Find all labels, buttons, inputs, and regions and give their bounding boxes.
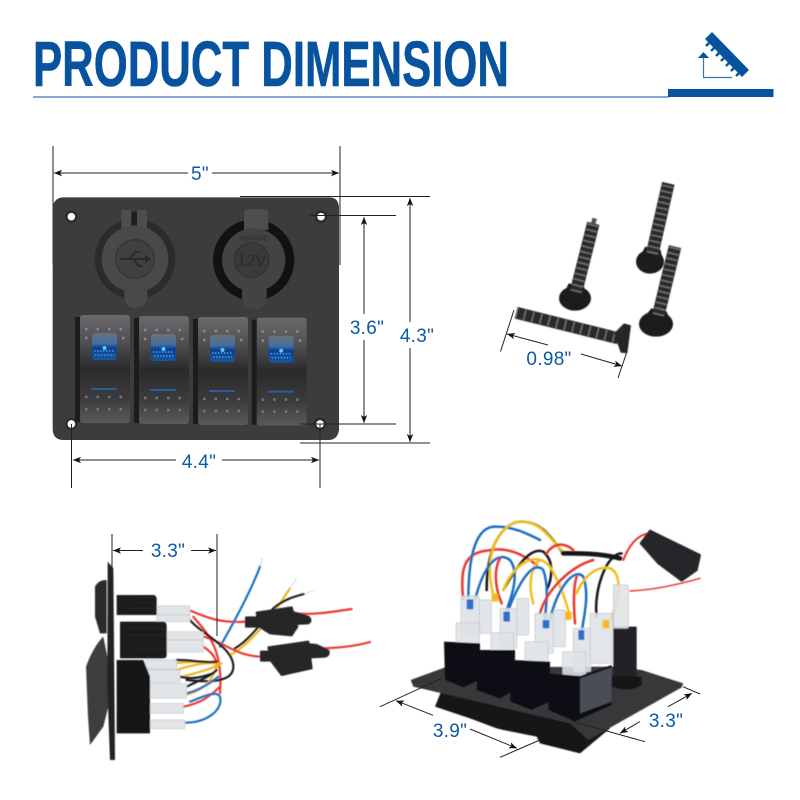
screw front right [639,247,675,337]
fuse holder bottom [261,642,329,675]
fuse holder [641,531,700,581]
connector colour tips [467,593,609,640]
rocker caps [86,637,113,745]
screw lying flat [516,313,631,353]
dimension: width 3.9 inch rear: 3.9" [433,721,467,742]
rocker switches [75,315,307,426]
screw head top left [559,218,595,311]
dimension: height 3.6 inch: 3.6" [350,318,384,339]
rear view: panel with wiring [411,522,700,753]
dimension: screw length 0.98 inch: 0.98" [526,349,572,370]
screws [516,183,675,353]
dimension: height 4.3 inch: 4.3" [400,326,434,347]
switch body [117,660,150,733]
switch side highlight [580,667,612,713]
dimension: depth 3.3 inch rear: 3.3" [649,711,683,732]
dimension: height 3.6 inch [300,216,396,424]
12V socket: MARINE [240,234,268,243]
plate edge [107,562,115,760]
dimension: width 5 inch: 5" [191,164,209,185]
dimension: depth 3.3 inch rear [573,687,700,742]
plate [53,197,339,440]
rocker backs under plate [435,690,610,753]
side view: panel with wiring [86,558,370,760]
dimension lines behind panel [53,146,340,265]
dimension: screw length 0.98 inch [500,310,626,378]
12V socket [213,209,294,309]
dimension: width 4.4 inch: 4.4" [182,452,216,473]
rear socket barrel [612,627,642,690]
icon: ruler and axis arrow [698,32,749,78]
switch bodies [444,642,612,722]
dimension: width 4.4 inch [72,424,320,488]
fuse holder top [246,607,310,635]
title: PRODUCT DIMENSION [33,28,509,100]
plate [411,667,683,740]
dimension: depth 3.3 inch side: 3.3" [151,541,185,562]
dimension: height 4.3 inch [240,196,434,443]
socket barrels [117,595,167,658]
dimension: width 3.9 inch rear [380,678,540,757]
screw back right [636,183,668,274]
panel: switch panel front view [53,197,339,440]
USB socket [95,210,175,308]
header rule [33,89,774,98]
wire loops [462,522,700,633]
12V socket: 12V [237,251,267,270]
dimension: depth 3.3 inch side [112,534,217,660]
wires [173,558,370,723]
terminal connectors [145,606,203,729]
terminal connectors [456,585,628,676]
mounting holes [66,212,326,429]
